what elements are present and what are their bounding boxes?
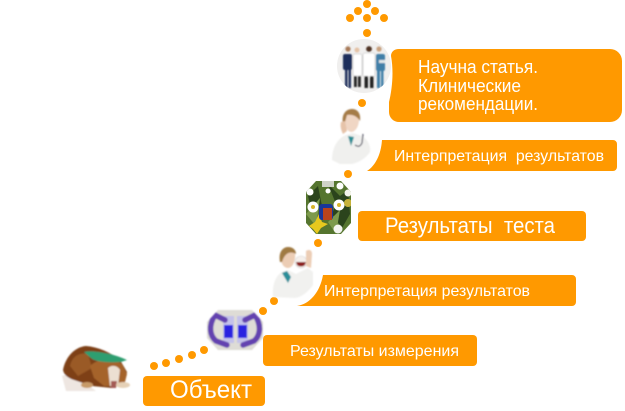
step 3 label: Интерпретация результатов: [297, 275, 576, 306]
step 3 label: Интерпретация результатов: Интерпретация результатов: [324, 283, 530, 300]
step 2 label: Результаты измерения: Результаты измерения: [290, 343, 459, 360]
icon: bulldog with ice pack: [62, 346, 130, 391]
step 5 label: Интерпретация результатов: Интерпретация результатов: [394, 148, 604, 165]
icon: scientist holding flask: [273, 247, 313, 298]
step 6 label: Научна статья. Клинические рекомендации.: [389, 49, 622, 122]
icon: team of four medics: [337, 39, 391, 93]
step 4 label: Результаты теста: [358, 211, 586, 241]
step 1 label: Объект: [143, 376, 265, 406]
step 2 label: Результаты измерения: [263, 335, 477, 366]
step 6 label: Научна статья. Клинические рекомендации.: рекомендации.: [418, 94, 538, 114]
arrow: upward dotted arrowhead: [346, 0, 388, 22]
icon: flowers and reagent jar: [306, 180, 352, 235]
icon: gloved hands with gel: [207, 310, 263, 350]
step 6 label: Научна статья. Клинические рекомендации.: Клинические: [418, 76, 521, 96]
step 5 label: Интерпретация результатов: [367, 140, 617, 171]
icon: thoughtful doctor: [332, 109, 370, 164]
dotted path: [150, 29, 371, 370]
step 1 label: Объект: Объект: [170, 376, 253, 404]
step 4 label: Результаты теста: Результаты теста: [385, 213, 556, 238]
step 6 label: Научна статья. Клинические рекомендации.: Научна статья.: [418, 57, 538, 77]
